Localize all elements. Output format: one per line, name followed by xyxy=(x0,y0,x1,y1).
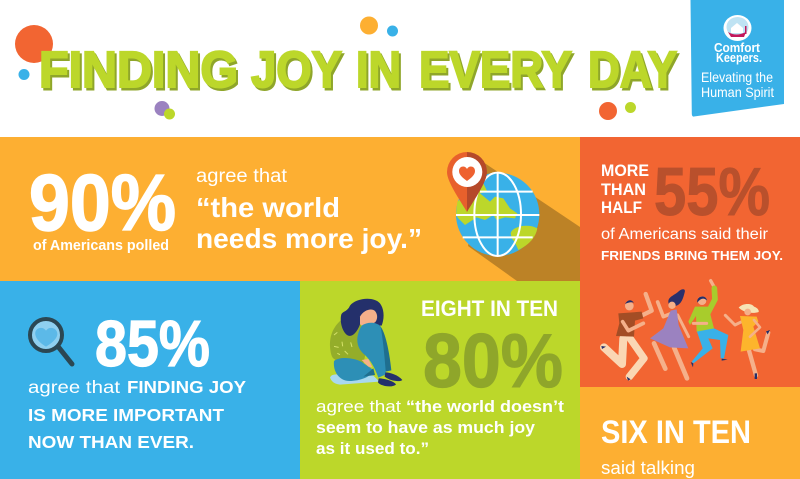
label: six in ten: SIX IN TEN xyxy=(601,414,751,450)
quote: the world needs more joy xyxy=(196,192,422,254)
label: more than half xyxy=(601,162,649,217)
caption: of Americans polled: of Americans polled xyxy=(33,238,169,254)
label: eight in ten: EIGHT IN TEN xyxy=(421,296,558,321)
title: FINDING xyxy=(39,41,238,98)
dancer 2 xyxy=(650,289,689,378)
text: agree that: agree that xyxy=(196,166,288,187)
decorative confetti dots xyxy=(15,16,636,120)
stat: 80%: 80% xyxy=(423,319,563,404)
text: friends bring them joy: FRIENDS BRING THEM JOY. xyxy=(601,248,783,263)
icon: map pin xyxy=(447,152,487,212)
title xyxy=(39,41,679,100)
logo tagline: Human Spirit xyxy=(701,84,774,100)
header background xyxy=(0,0,800,137)
icon: magnifying glass with heart xyxy=(30,319,72,364)
illustration: dancing friends xyxy=(601,281,770,381)
panel: 80 percent xyxy=(300,281,580,479)
logo badge xyxy=(690,0,784,117)
dancer 3 xyxy=(688,281,728,367)
title: IN xyxy=(358,44,403,100)
panel: 85 percent xyxy=(0,281,300,479)
text: said talking: said talking xyxy=(601,458,695,478)
icon: globe xyxy=(456,173,539,256)
text: finding joy is more important: IS MORE IMPORTANT xyxy=(28,405,224,425)
text: finding joy is more important: FINDING JOY xyxy=(127,377,246,397)
quote: the world needs more joy: needs more joy.” xyxy=(196,223,422,254)
text: the world doesn't have as much joy: as it used to.” xyxy=(316,439,429,458)
panel: 55 percent xyxy=(580,137,800,387)
text: the world doesn't have as much joy: seem to have as much joy xyxy=(316,418,536,437)
text: the world doesn't have as much joy: “the world doesn’t xyxy=(406,397,564,416)
dancer 1 xyxy=(601,294,652,381)
label: more than half: HALF xyxy=(601,199,642,217)
text: finding joy is more important: agree that xyxy=(28,377,120,397)
panel: six in ten xyxy=(580,387,800,479)
logo icon xyxy=(724,15,752,41)
title: EVERY xyxy=(421,44,574,100)
logo wordmark: Keepers. xyxy=(716,50,762,65)
panel: 90 percent xyxy=(0,137,580,281)
text: finding joy is more important: NOW THAN EVER. xyxy=(28,432,194,452)
text: finding joy is more important xyxy=(28,377,246,452)
title: FINDING xyxy=(41,44,240,100)
stat: 90%: 90% xyxy=(29,158,176,247)
illustration: sad woman xyxy=(330,299,402,386)
logo wordmark xyxy=(714,40,762,65)
text: friends bring them joy xyxy=(601,226,783,263)
title: JOY xyxy=(251,41,342,98)
logo tagline xyxy=(701,69,774,100)
logo tagline: Elevating the xyxy=(701,69,773,85)
title: EVERY xyxy=(419,41,572,98)
quote: the world needs more joy: “the world xyxy=(196,192,340,223)
logo wordmark: Comfort xyxy=(714,40,761,55)
text: the world doesn't have as much joy xyxy=(316,397,564,458)
stat: 85%: 85% xyxy=(95,307,210,380)
label: more than half: MORE xyxy=(601,162,649,180)
title: DAY xyxy=(588,41,677,98)
text: the world doesn't have as much joy: agree that xyxy=(316,397,401,416)
dancer 4 xyxy=(725,304,770,379)
title: IN xyxy=(356,41,401,98)
title: DAY xyxy=(590,44,679,100)
title: JOY xyxy=(253,44,344,100)
label: more than half: THAN xyxy=(601,181,646,199)
text: friends bring them joy: of Americans said their xyxy=(601,226,768,243)
stat: 55%: 55% xyxy=(654,154,770,230)
long shadow xyxy=(468,162,580,281)
